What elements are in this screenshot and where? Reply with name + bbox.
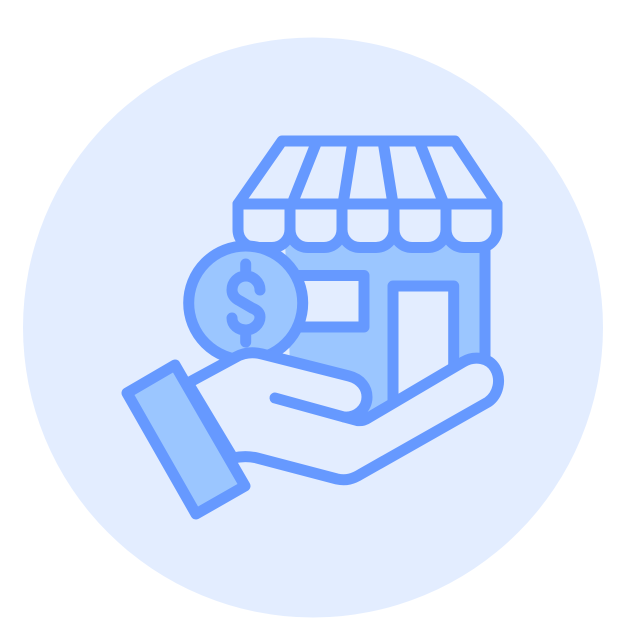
awning stripes — [292, 141, 444, 204]
store window — [280, 276, 364, 327]
sleeve cuff — [127, 365, 245, 514]
store right edge — [480, 245, 490, 362]
hand outline — [188, 353, 499, 480]
awning roof — [238, 141, 497, 204]
store wall — [285, 240, 485, 425]
awning valance scallops — [238, 204, 497, 248]
icon: storefront — [238, 141, 497, 425]
icon: open hand — [127, 353, 499, 514]
icon: dollar coin — [189, 246, 303, 360]
finger line — [275, 398, 344, 417]
coin disc — [189, 246, 303, 360]
store door — [393, 286, 454, 402]
dollar sign — [232, 264, 260, 342]
